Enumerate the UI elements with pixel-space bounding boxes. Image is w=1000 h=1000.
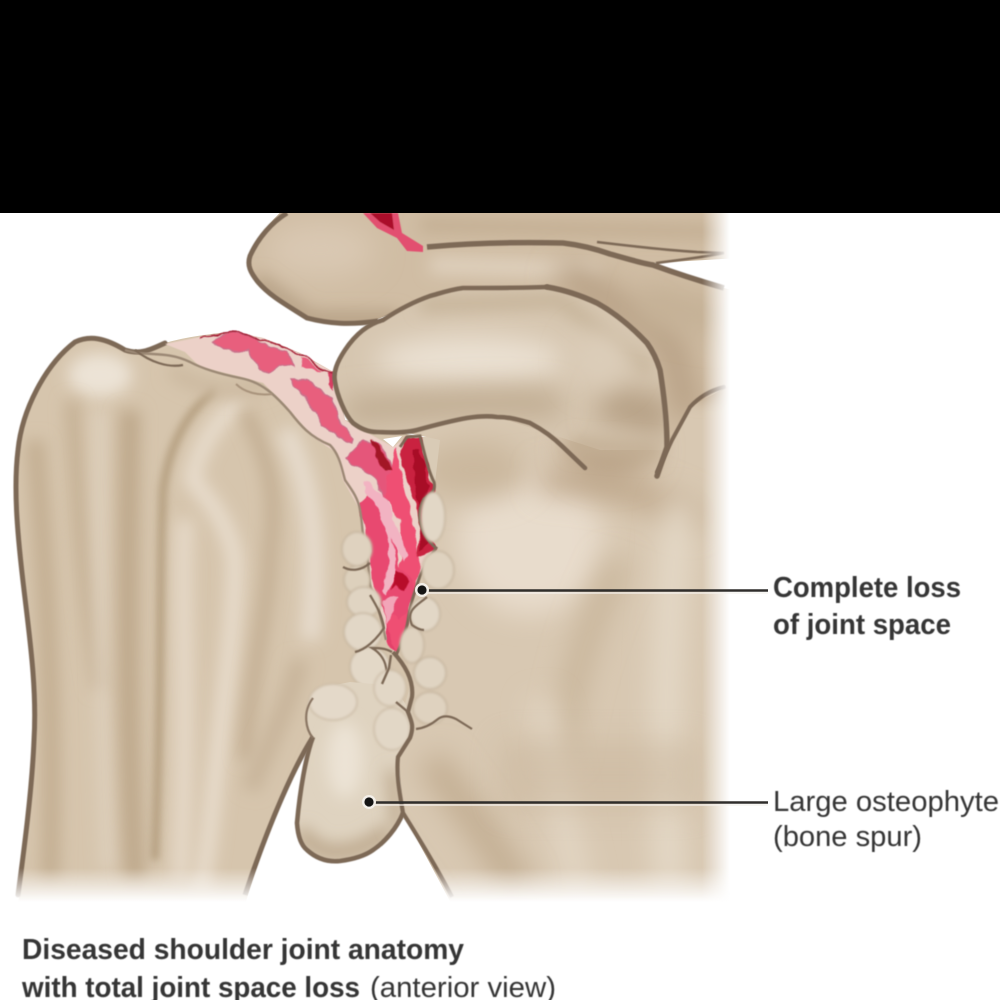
cartilage: pale streaks bbox=[363, 483, 408, 625]
humerus neck outline bbox=[245, 737, 313, 895]
humerus outline bbox=[16, 338, 165, 895]
cartilage upper jagged edge bbox=[200, 333, 333, 375]
illustration: shoulder joint bones bbox=[16, 205, 740, 905]
joint fissure bbox=[416, 716, 472, 729]
label: large osteophyte: Large osteophyte bbox=[773, 786, 999, 818]
joint right outline bbox=[396, 436, 436, 655]
label: large osteophyte: (bone spur) bbox=[773, 821, 922, 853]
fissure branch bbox=[382, 655, 408, 712]
joint underlay bbox=[405, 436, 440, 722]
acromion outlines bbox=[249, 213, 724, 323]
small groove on humeral head bbox=[236, 384, 272, 395]
lower joint line bbox=[393, 652, 452, 897]
acromion and upper scapula bbox=[248, 205, 740, 445]
large osteophyte bbox=[297, 670, 413, 861]
cartilage: pink erosions bbox=[212, 333, 420, 653]
callout: large osteophyte bbox=[362, 795, 768, 809]
small white gap at joint top bbox=[383, 436, 402, 447]
black band across top bbox=[0, 0, 1000, 213]
label: complete loss of joint space bbox=[773, 572, 961, 641]
scapula body bbox=[399, 387, 728, 898]
bump contours bbox=[342, 562, 428, 672]
red lesion at acromion bbox=[363, 213, 423, 252]
label: complete loss of joint space: of joint space bbox=[773, 609, 951, 641]
white gap under acromion bbox=[654, 259, 728, 288]
osteophyte cluster around joint bbox=[342, 492, 454, 724]
humerus articular outline bbox=[125, 350, 386, 640]
humerus bbox=[16, 332, 435, 905]
caption bbox=[21, 934, 556, 1000]
callout: complete loss of joint space bbox=[415, 583, 768, 597]
label: large osteophyte bbox=[773, 786, 999, 853]
caption: Diseased shoulder joint anatomy bbox=[22, 934, 464, 966]
cartilage: dark red damage bbox=[370, 437, 437, 590]
cartilage: pale layer bbox=[165, 332, 435, 653]
label: complete loss of joint space: Complete loss bbox=[773, 572, 961, 604]
humeral head crease bbox=[135, 350, 183, 366]
coracoid process bbox=[334, 287, 724, 476]
